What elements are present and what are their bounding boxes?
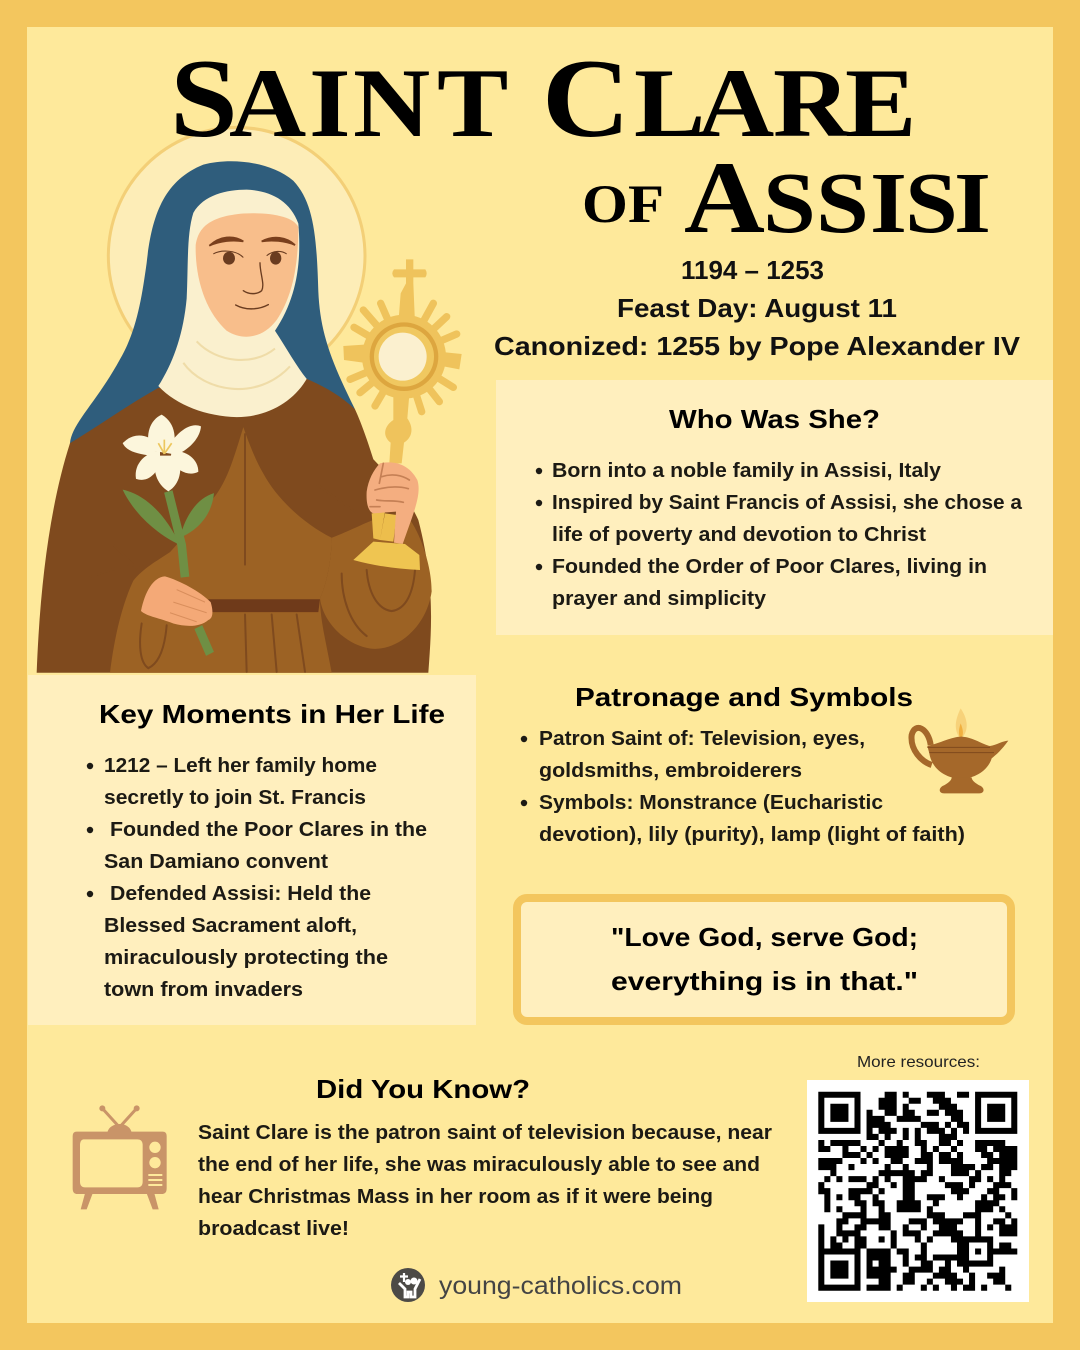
bullet list: Patron Saint of: Television, eyes, xyxy=(539,728,865,750)
bullet list: Defended Assisi: Held the xyxy=(110,883,371,905)
qr code xyxy=(818,1092,1017,1291)
veil xyxy=(70,161,355,443)
title: I xyxy=(954,154,991,251)
bullet list: secretly to join St. Francis xyxy=(104,787,366,809)
bullet list: Founded the Order of Poor Clares, living in xyxy=(552,556,987,578)
title: S xyxy=(170,37,238,161)
hand holding lily xyxy=(141,576,212,626)
panel: key moments xyxy=(28,675,476,1025)
lily stem and leaves xyxy=(123,490,214,654)
right sleeve xyxy=(320,520,432,649)
icon: oil lamp xyxy=(912,708,1008,793)
facial features xyxy=(209,237,295,309)
heading: Did You Know? xyxy=(316,1074,530,1104)
monstrance xyxy=(343,259,462,542)
face xyxy=(196,213,298,337)
icon: young catholics logo xyxy=(391,1268,425,1302)
title: C xyxy=(542,37,630,161)
title: F xyxy=(628,174,664,234)
title: R xyxy=(773,49,852,158)
title: S xyxy=(763,154,816,251)
title: A xyxy=(684,141,765,255)
monstrance and right hand xyxy=(343,259,462,570)
bullet list: 1212 – Left her family home xyxy=(104,755,377,777)
title: A xyxy=(697,49,774,158)
title: I xyxy=(309,49,351,158)
monstrance foot xyxy=(353,542,420,570)
bullet list: San Damiano convent xyxy=(104,851,328,873)
title: T xyxy=(437,49,508,158)
tunic xyxy=(110,427,332,673)
dates and feast details: Canonized: 1255 by Pope Alexander IV xyxy=(494,331,1021,361)
bullet list: Inspired by Saint Francis of Assisi, she chose a xyxy=(552,492,1023,514)
bullet list: Born into a noble family in Assisi, Italy xyxy=(552,460,942,482)
callout: quote: everything is in that." xyxy=(611,966,918,996)
title: A xyxy=(229,49,306,158)
halo xyxy=(108,127,365,385)
footer: website xyxy=(391,1268,682,1302)
belt xyxy=(208,599,320,612)
icon: television xyxy=(73,1105,167,1209)
heading: Key Moments in Her Life xyxy=(99,699,445,729)
title: N xyxy=(353,49,430,158)
panel: who was she xyxy=(496,380,1053,635)
bullet list: devotion), lily (purity), lamp (light of faith) xyxy=(539,824,965,846)
body text xyxy=(198,1122,772,1240)
body text: the end of her life, she was miraculously able to see and xyxy=(198,1154,760,1176)
bullet list: miraculously protecting the xyxy=(104,947,388,969)
bullet list: goldsmiths, embroiderers xyxy=(539,760,802,782)
bullet list xyxy=(536,460,1023,610)
bullet list: Blessed Sacrament aloft, xyxy=(104,915,357,937)
title: E xyxy=(845,49,916,158)
panel: did you know xyxy=(73,1074,772,1240)
title: S xyxy=(816,154,869,251)
qr caption: More resources: xyxy=(857,1054,980,1071)
robe xyxy=(37,379,431,673)
illustration: Saint Clare with lily and monstrance xyxy=(37,127,462,673)
body text: Saint Clare is the patron saint of television because, near xyxy=(198,1122,772,1144)
lily flower xyxy=(123,415,201,491)
title: L xyxy=(634,49,705,158)
callout: quote: "Love God, serve God; xyxy=(611,922,918,952)
body text: broadcast live! xyxy=(198,1218,349,1240)
dates and feast details: 1194 – 1253 xyxy=(681,255,824,285)
bullet list: Symbols: Monstrance (Eucharistic xyxy=(539,792,883,814)
website url: young-catholics.com xyxy=(439,1272,682,1300)
bullet list xyxy=(87,755,427,1001)
bullet list: town from invaders xyxy=(104,979,303,1001)
title: I xyxy=(870,154,907,251)
heading: Patronage and Symbols xyxy=(575,682,913,712)
bullet list: life of poverty and devotion to Christ xyxy=(552,524,926,546)
title xyxy=(170,37,991,255)
dates and feast details xyxy=(494,255,1021,361)
callout: quote xyxy=(517,898,1011,1021)
dates and feast details: Feast Day: August 11 xyxy=(617,293,897,323)
title: O xyxy=(582,174,628,234)
bullet list: prayer and simplicity xyxy=(552,588,767,610)
bullet list xyxy=(521,728,965,846)
panel: patronage and symbols xyxy=(521,682,1008,846)
robe folds xyxy=(90,434,415,672)
right hand xyxy=(367,462,419,544)
qr code block xyxy=(807,1054,1029,1302)
wimple folds xyxy=(183,341,290,389)
wimple xyxy=(158,190,307,417)
heading: Who Was She? xyxy=(669,404,880,434)
bullet list: Founded the Poor Clares in the xyxy=(110,819,427,841)
title: S xyxy=(905,154,958,251)
body text: hear Christmas Mass in her room as if it were being xyxy=(198,1186,713,1208)
